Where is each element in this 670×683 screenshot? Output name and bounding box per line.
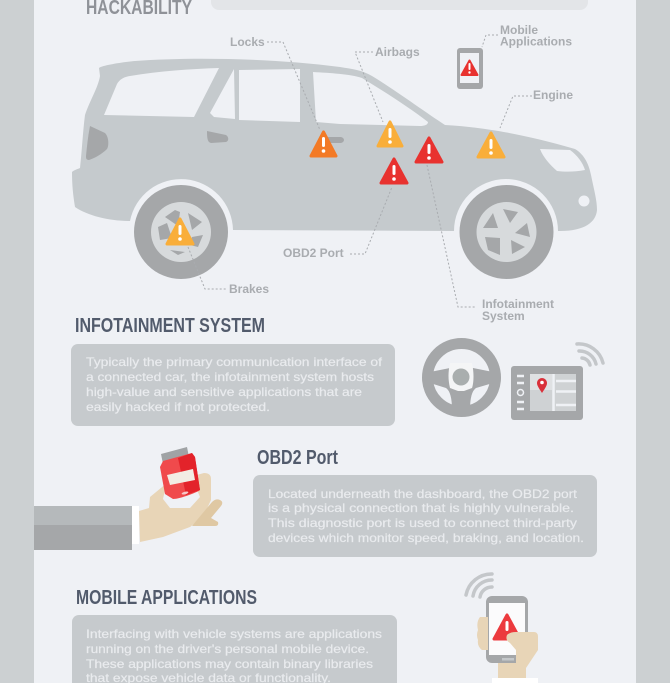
labels: Brakes xyxy=(229,282,269,296)
rear wheel xyxy=(134,185,228,279)
warning: locks xyxy=(311,132,336,156)
panel: infotainment text xyxy=(71,344,395,426)
panel: mobile applications text: These applications may contain binary libraries xyxy=(86,657,373,671)
panel: OBD2 text: devices which monitor speed, braking, and location. xyxy=(268,531,584,545)
panel: mobile applications text: Interfacing with vehicle systems are applications xyxy=(86,627,382,641)
fog light xyxy=(578,196,590,206)
icon: steering wheel xyxy=(428,344,496,412)
panel: infotainment text: high-value and sensitive applications that are xyxy=(86,385,362,399)
icon: navigation screen xyxy=(511,366,583,420)
icon: phone with warning xyxy=(457,48,483,89)
panel: infotainment text: Typically the primary communication interface of xyxy=(86,355,383,369)
icon: hand holding OBD2 device xyxy=(34,447,222,550)
panel: mobile applications text: running on the driver's personal mobile device. xyxy=(86,642,369,656)
heading: OBD2 port: OBD2 Port xyxy=(257,447,338,469)
labels: System xyxy=(482,309,525,323)
labels: Locks xyxy=(230,35,265,49)
labels: Mobile xyxy=(500,23,538,37)
labels xyxy=(229,23,573,323)
warning: brakes xyxy=(167,219,193,244)
panel: infotainment text: easily hacked if not protected. xyxy=(86,400,270,414)
labels: Infotainment xyxy=(482,297,554,311)
warning: engine xyxy=(478,133,504,157)
warning: infotainment xyxy=(416,138,442,162)
panel: OBD2 text: This diagnostic port is used to connect third-party xyxy=(268,516,577,530)
tail light xyxy=(86,126,108,160)
warning: OBD2 port xyxy=(381,159,407,183)
labels: Applications xyxy=(500,34,572,48)
icon: hand holding phone with wifi xyxy=(466,574,538,683)
headlight xyxy=(540,149,585,172)
labels: OBD2 Port xyxy=(283,246,344,260)
panel: OBD2 text: Located underneath the dashboard, the OBD2 port xyxy=(268,487,578,501)
front wheel xyxy=(460,185,554,279)
car body xyxy=(72,59,597,231)
labels: Engine xyxy=(533,88,573,102)
heading: mobile applications: MOBILE APPLICATIONS xyxy=(76,587,257,609)
top text box xyxy=(211,0,588,10)
panel: OBD2 text xyxy=(253,475,597,557)
panel: mobile applications text xyxy=(72,615,397,683)
labels: Airbags xyxy=(375,45,420,59)
door handles xyxy=(207,131,344,143)
icon: wifi signal xyxy=(577,344,603,365)
car windows xyxy=(104,68,428,126)
heading: infotainment system: INFOTAINMENT SYSTEM xyxy=(75,315,265,337)
callout leader lines xyxy=(188,35,532,307)
panel: infotainment text: a connected car, the infotainment system hosts xyxy=(86,370,374,384)
warning: airbags xyxy=(378,122,402,146)
car illustration xyxy=(72,59,597,279)
panel: OBD2 text: is a physical connection that is highly vulnerable. xyxy=(268,501,574,515)
